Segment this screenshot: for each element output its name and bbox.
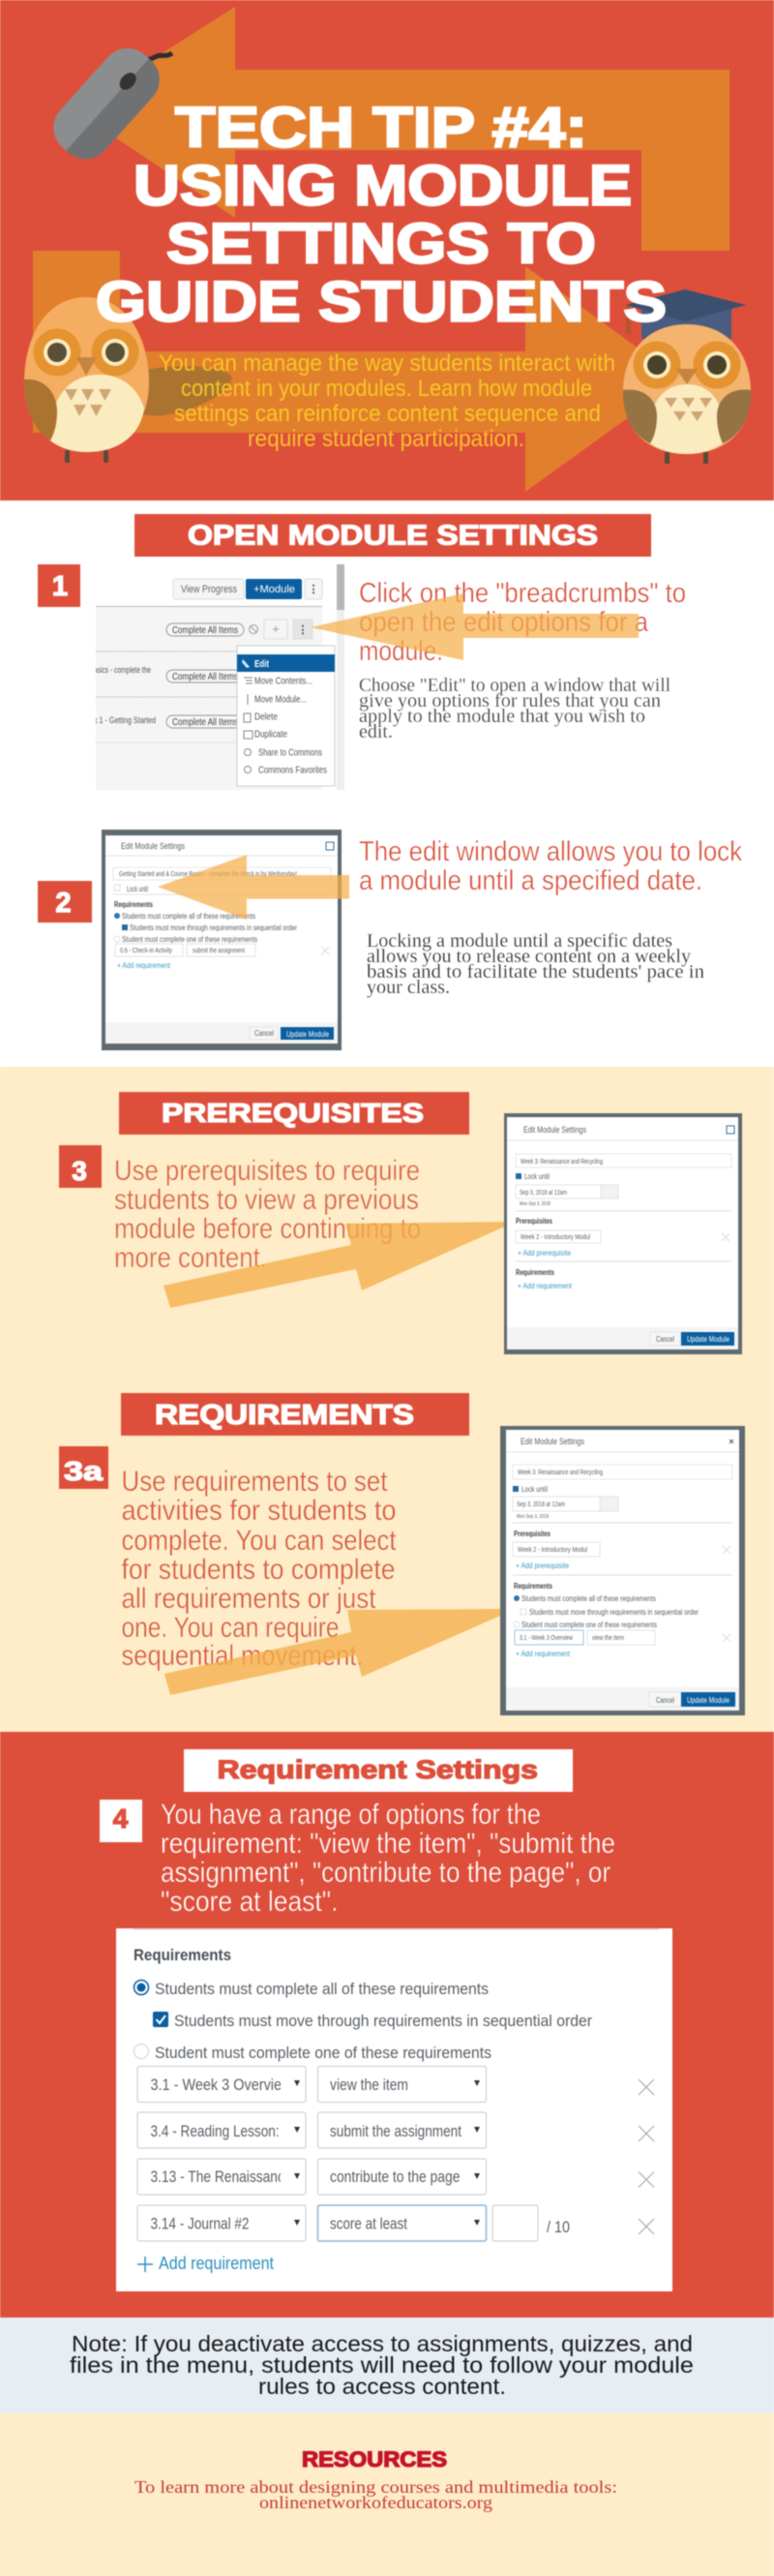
screenshot: requirements settings: Edit Module Settings <box>521 1437 584 1446</box>
panel: requirement settings <box>0 1732 774 2318</box>
intro text: settings can reinforce content sequence and <box>174 401 601 427</box>
arrow: to breadcrumbs <box>311 593 639 660</box>
screenshot: module menu: Move Module... <box>254 693 307 705</box>
add requirement link: Add requirement <box>159 2254 274 2273</box>
screenshot: prerequisites settings: Cancel <box>656 1335 674 1344</box>
text: edit window: a module until a specified date. <box>359 865 702 896</box>
panel: resources: To learn more about designing courses and multimedia tools: <box>134 2477 617 2497</box>
text: use requirements: sequential movement. <box>122 1640 364 1672</box>
intro text: You can manage the way students interact with <box>159 350 615 377</box>
select labels: score at least <box>330 2215 407 2232</box>
screenshot: edit module settings lock: Student must complete one of these requirements <box>122 935 257 944</box>
intro text <box>159 350 615 452</box>
step badge 1: 1 <box>52 571 68 602</box>
step badge 4 <box>100 1800 142 1842</box>
text: click on breadcrumbs <box>359 578 686 667</box>
text: locking a module: basis and to facilitate the students' pace in <box>367 961 704 983</box>
screenshot: prerequisites settings: Prerequisites <box>516 1217 552 1226</box>
screenshot: module menu: Commons Favorites <box>258 765 327 776</box>
heading: requirements: REQUIREMENTS <box>155 1400 414 1431</box>
title: GUIDE STUDENTS <box>96 271 667 333</box>
text: use prerequisites: module before continuing to <box>114 1213 421 1245</box>
select labels: contribute to the page <box>330 2167 461 2186</box>
text: use requirements: all requirements or just <box>122 1583 376 1615</box>
screenshot: requirements form: Students must move through requirements in sequential order <box>174 2012 592 2030</box>
screenshot: edit module settings lock <box>102 830 342 1050</box>
heading: prerequisites <box>119 1092 469 1135</box>
text: choose edit <box>359 675 670 742</box>
step badge 2 <box>38 881 92 923</box>
heading: open module settings <box>134 514 651 557</box>
screenshot: edit module settings lock: Students must move through requirements in sequential order <box>130 924 297 932</box>
screenshot: requirements settings: Student must complete one of these requirements <box>521 1621 657 1629</box>
panel: note: Note: If you deactivate access to assignments, quizzes, and <box>72 2331 693 2356</box>
text: locking a module: Locking a module until a specific dates <box>367 930 672 952</box>
title <box>96 97 667 333</box>
heading: requirements <box>121 1393 469 1436</box>
text: choose edit: apply to the module that you wish to <box>359 706 645 727</box>
panel: note <box>0 2318 774 2413</box>
text: use requirements: activities for students to <box>122 1495 397 1527</box>
screenshot: prerequisites settings: Requirements <box>516 1268 554 1277</box>
screenshot: prerequisites settings: Sep 3, 2018 at 12am <box>520 1190 567 1197</box>
screenshot: edit module settings lock: Lock until <box>127 885 148 894</box>
text: use prerequisites: more content. <box>114 1242 267 1274</box>
select rows <box>137 2066 538 2241</box>
text: click on breadcrumbs: module. <box>359 636 443 667</box>
step badge 3: 3 <box>72 1156 87 1186</box>
screenshot: requirements settings: Lock until <box>521 1485 548 1494</box>
screenshot: module menu: Delete <box>254 711 278 722</box>
text: range of options: assignment", "contribute to the page", or <box>161 1857 610 1889</box>
screenshot: edit module settings lock: submit the assignment <box>193 948 245 955</box>
heading: requirement settings <box>184 1749 573 1792</box>
screenshot: requirements settings: Requirements <box>514 1582 552 1591</box>
screenshot: requirements settings: Week 3: Renaissance and Recycling <box>518 1470 603 1476</box>
icon: owl with graduation cap <box>623 289 751 464</box>
text: use prerequisites: Use prerequisites to require <box>114 1155 420 1187</box>
screenshot: prerequisites settings: Lock until <box>524 1172 550 1181</box>
select labels: 3.1 - Week 3 Overview <box>151 2076 292 2094</box>
screenshot: requirements settings: view the item <box>592 1635 624 1642</box>
text: edit window <box>359 836 742 896</box>
screenshot: module menu: ⋮ <box>298 624 308 636</box>
screenshot: module menu: Move Contents... <box>254 676 313 687</box>
arrow: bottom orange pointing right <box>33 251 681 492</box>
text: locking a module: your class. <box>367 977 450 998</box>
screenshot: requirements settings: Sep 3, 2018 at 12am <box>517 1501 565 1508</box>
screenshot: module menu: Duplicate <box>254 728 287 740</box>
select labels: 3.4 - Reading Lesson: V <box>151 2122 292 2140</box>
arrow: to requirements <box>164 1609 516 1695</box>
step badge 3a <box>59 1446 108 1489</box>
screenshot: module menu <box>94 564 344 790</box>
panel: prerequisites and requirements <box>0 1067 774 1732</box>
panel: resources <box>0 2413 774 2576</box>
panel: resources: onlinenetworkofeducators.org <box>259 2493 492 2512</box>
screenshot: requirements settings <box>500 1426 745 1715</box>
screenshot: prerequisites settings: Edit Module Settings <box>523 1125 586 1135</box>
screenshot: module menu: Edit <box>254 658 269 670</box>
screenshot: requirements form: Students must complete all of these requirements <box>155 1980 489 1998</box>
screenshot: edit module settings lock: Edit Module Settings <box>121 841 185 851</box>
screenshot: module menu: + <box>272 621 280 636</box>
screenshot: requirements settings: Students must complete all of these requirements <box>521 1594 656 1603</box>
screenshot: module menu: k 1 - Getting Started <box>94 715 156 725</box>
intro text: require student participation. <box>248 426 524 452</box>
heading: requirement settings: Requirement Settings <box>217 1755 538 1784</box>
screenshot: module menu: Share to Commons <box>258 747 322 759</box>
icon: owl left <box>24 297 231 463</box>
dropdown carets <box>294 2080 480 2226</box>
select labels: submit the assignment <box>330 2122 461 2140</box>
text: use prerequisites <box>114 1155 421 1274</box>
screenshot: module menu: View Progress <box>181 584 237 595</box>
icon: computer mouse <box>43 38 172 169</box>
screenshot: module menu: ⋮ <box>308 584 319 595</box>
screenshot: requirements settings: Mon Sep 3, 2018 <box>517 1514 549 1520</box>
text: choose edit: give you options for rules that you can <box>359 690 661 712</box>
title: USING MODULE <box>134 155 632 217</box>
screenshot: module menu: Complete All Items <box>172 625 238 636</box>
text: click on breadcrumbs: open the edit options for a <box>359 607 649 638</box>
screenshot: prerequisites settings: Update Module <box>687 1335 729 1344</box>
select labels: 3.13 - The Renaissance <box>151 2167 292 2186</box>
step badge 4: 4 <box>113 1803 129 1834</box>
step badge 1 <box>38 564 80 607</box>
step badge 2: 2 <box>55 888 72 919</box>
screenshot: edit module settings lock: Cancel <box>254 1029 274 1038</box>
text: use requirements: complete. You can select <box>122 1525 397 1557</box>
text: range of options: You have a range of options for the <box>161 1799 541 1831</box>
screenshot: module menu: Complete All Items <box>172 672 238 682</box>
text: use requirements: one. You can require <box>122 1612 339 1644</box>
screenshot: edit module settings lock: Update Module <box>286 1030 329 1039</box>
screenshot: prerequisites settings <box>504 1113 742 1354</box>
panel: open module settings <box>37 513 742 1051</box>
screenshot: prerequisites settings: Week 3: Renaissance and Recycling <box>521 1159 603 1166</box>
title: TECH TIP #4: <box>175 97 587 159</box>
text: click on breadcrumbs: Click on the "breadcrumbs" to <box>359 578 686 609</box>
text: locking a module <box>367 930 704 998</box>
screenshot: prerequisites settings: + Add requirement <box>518 1282 573 1290</box>
screenshot: module menu: Complete All Items <box>172 717 238 728</box>
screenshot: edit module settings lock: Students must complete all of these requirements <box>122 912 255 921</box>
screenshot: prerequisites settings: + Add prerequisite <box>518 1249 571 1258</box>
panel: note: files in the menu, students will need to follow your module <box>70 2352 694 2378</box>
remove marks <box>639 2079 654 2234</box>
screenshot: requirements settings: + Add prerequisite <box>516 1561 569 1570</box>
text: range of options <box>161 1799 615 1918</box>
screenshot: requirements settings: 3.1 - Week 3 Overview <box>520 1635 574 1642</box>
text: use prerequisites: students to view a previous <box>114 1184 419 1216</box>
heading: prerequisites: PREREQUISITES <box>162 1098 424 1128</box>
screenshot: requirements form: Student must complete one of these requirements <box>155 2044 491 2062</box>
select labels: view the item <box>330 2076 408 2094</box>
select labels: / 10 <box>547 2218 570 2236</box>
screenshot: prerequisites settings: Week 2 - Introductory Modul <box>521 1234 590 1241</box>
screenshot: requirements settings: Students must move through requirements in sequential order <box>529 1608 699 1617</box>
screenshot: requirements settings: + Add requirement <box>516 1650 571 1658</box>
text: choose edit: edit. <box>359 721 393 742</box>
screenshot: module menu: asics - complete the <box>94 665 151 675</box>
screenshot: edit module settings lock: 0.6 - Check-in Activity <box>120 948 172 955</box>
heading: open module settings: OPEN MODULE SETTINGS <box>188 521 598 552</box>
text: use requirements: for students to complete <box>122 1554 395 1586</box>
text: choose edit: Choose "Edit" to open a window that will <box>359 675 670 696</box>
select labels <box>151 2076 570 2236</box>
screenshot: requirements settings: Week 2 - Introductory Modul <box>518 1547 587 1554</box>
title: SETTINGS TO <box>166 213 596 275</box>
screenshot: requirements settings: Cancel <box>656 1696 674 1705</box>
arrow: to lock until <box>158 855 349 920</box>
screenshot: requirements form <box>116 1928 672 2291</box>
panel: note: rules to access content. <box>258 2374 506 2399</box>
intro text: content in your modules. Learn how module <box>181 376 592 402</box>
screenshot: edit module settings lock: + Add requirement <box>117 961 171 970</box>
screenshot: module menu: +Module <box>253 584 295 595</box>
text: locking a module: allows you to release content on a weekly <box>367 946 691 967</box>
text: range of options: requirement: "view the item", "submit the <box>161 1828 615 1860</box>
screenshot: requirements settings: Prerequisites <box>514 1530 551 1538</box>
step badge 3a: 3a <box>64 1456 104 1486</box>
select labels: 3.14 - Journal #2 <box>151 2215 250 2232</box>
text: use requirements <box>122 1466 397 1672</box>
arrow: top orange pointing left <box>74 7 729 251</box>
text: range of options: "score at least". <box>161 1886 339 1918</box>
text: use requirements: Use requirements to set <box>122 1466 388 1498</box>
screenshot: edit module settings lock: Getting Started and & Course Basics - complete the check in by Wednesday! <box>119 871 297 878</box>
step badge 3 <box>59 1145 102 1188</box>
screenshot: edit module settings lock: Requirements <box>114 900 153 909</box>
screenshot: requirements settings: Update Module <box>687 1696 729 1705</box>
screenshot: requirements form: Requirements <box>134 1946 231 1964</box>
arrow: to prerequisites <box>164 1222 516 1308</box>
hero panel <box>0 0 774 500</box>
panel: resources: RESOURCES <box>302 2447 447 2471</box>
screenshot: prerequisites settings: Mon Sep 3, 2018 <box>520 1201 551 1207</box>
